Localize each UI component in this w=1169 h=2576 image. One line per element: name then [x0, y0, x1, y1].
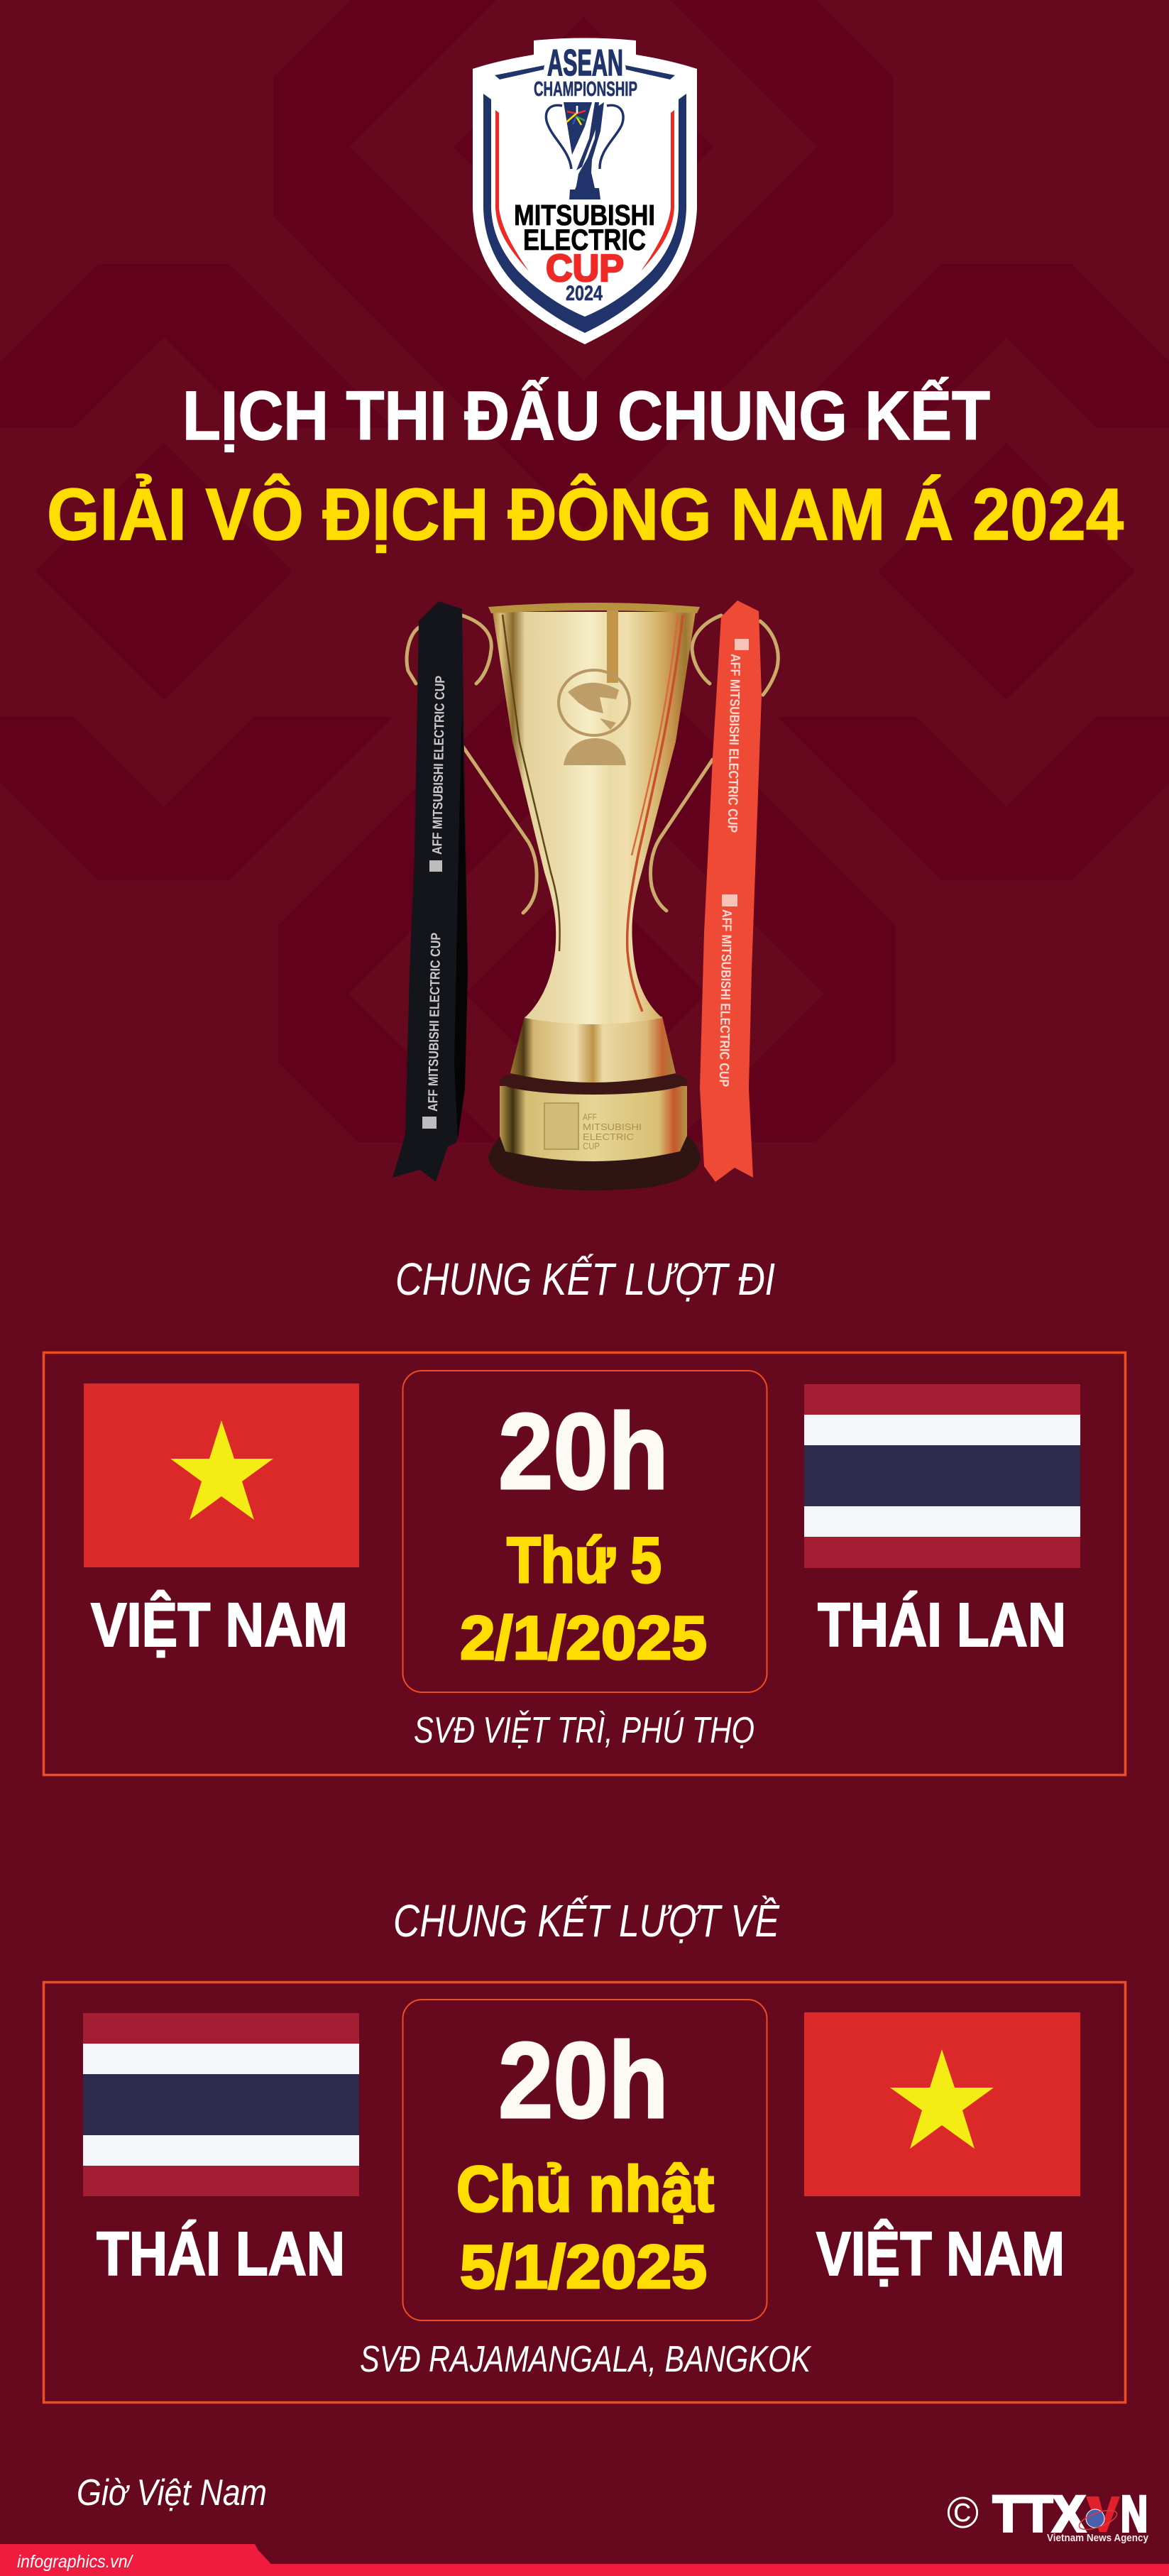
trophy emblem: globe and fan: [559, 670, 630, 765]
flag: Thailand: [804, 1384, 1080, 1568]
venue: SVĐ VIỆT TRÌ, PHÚ THỌ: [414, 1710, 754, 1751]
trophy base engraving: ELECTRIC: [583, 1131, 634, 1142]
logo trophy icon: [546, 102, 623, 199]
team name: Viet Nam: VIỆT NAM: [816, 2220, 1065, 2289]
text: MITSUBISHI: MITSUBISHI: [514, 199, 655, 231]
trophy base engraving: [544, 1103, 642, 1151]
team name: Thai Lan: THÁI LAN: [97, 2220, 345, 2289]
time and date box: [403, 1371, 767, 1692]
trophy base engraving: CUP: [583, 1141, 600, 1151]
trophy upper tier: [510, 1016, 676, 1083]
top side bars: [495, 65, 675, 80]
flag: Vietnam: [84, 1383, 359, 1567]
heading: second leg: CHUNG KẾT LƯỢT VỀ: [393, 1895, 780, 1946]
title: [47, 377, 1124, 555]
footer bar: [0, 2544, 1169, 2576]
trophy dark ring: [499, 1068, 688, 1095]
note: Vietnam time: Giờ Việt Nam: [77, 2472, 267, 2514]
flag: Vietnam: [804, 2012, 1080, 2196]
time and date box: [403, 2000, 767, 2320]
trophy bowl and stem: [493, 612, 696, 1024]
footer website: infographics.vn/: [17, 2552, 134, 2572]
agency letter V: [1086, 2496, 1120, 2532]
flag: Thailand: [83, 2013, 359, 2196]
text: 2024: 2024: [566, 282, 603, 305]
weekday: Chủ nhật: [456, 2154, 714, 2225]
shield navy band: [483, 94, 686, 333]
copyright mark: ©: [947, 2489, 979, 2538]
date: 5/1/2025: [460, 2233, 707, 2301]
panel: second leg match: [44, 1982, 1126, 2402]
red ribbon: [700, 601, 762, 1182]
agency letter N: N: [1121, 2487, 1148, 2543]
venue: SVĐ RAJAMANGALA, BANGKOK: [360, 2339, 812, 2380]
trophy photo illustration: [393, 601, 778, 1190]
black ribbon: [393, 601, 468, 1182]
shield red thin lines: [495, 110, 674, 271]
logo: ASEAN Championship Mitsubishi Electric Cup 2024 shield: [473, 38, 697, 344]
weekday: Thứ 5: [507, 1525, 662, 1596]
text: ELECTRIC: ELECTRIC: [523, 223, 646, 256]
trophy bottom disc: [488, 1134, 701, 1190]
heading: first leg: CHUNG KẾT LƯỢT ĐI: [395, 1253, 775, 1305]
team name: Thai Lan: THÁI LAN: [818, 1591, 1066, 1660]
ribbon label 3: AFF MITSUBISHI ELECTRIC CUP: [725, 654, 742, 833]
trophy lower tier: [500, 1086, 687, 1161]
kick-off time: 20h: [498, 2020, 669, 2141]
trophy base engraving: AFF: [583, 1112, 597, 1122]
text: CUP: CUP: [546, 247, 624, 290]
team name: Viet Nam: VIỆT NAM: [91, 1591, 348, 1660]
panel: first leg match: [44, 1353, 1126, 1775]
trophy handles: [407, 615, 778, 913]
text: ASEAN: ASEAN: [547, 43, 623, 84]
title line 1: LỊCH THI ĐẤU CHUNG KẾT: [182, 377, 990, 454]
trophy rim: [488, 603, 700, 613]
kick-off time: 20h: [498, 1391, 669, 1512]
agency globe: [1077, 2506, 1119, 2533]
trophy reflections: [503, 615, 683, 1012]
trophy base engraving: MITSUBISHI: [583, 1122, 642, 1132]
ribbon label 2: AFF MITSUBISHI ELECTRIC CUP: [426, 932, 444, 1112]
ribbon label 4: AFF MITSUBISHI ELECTRIC CUP: [716, 909, 734, 1087]
panel outer border: [44, 1353, 1126, 1775]
date: 2/1/2025: [460, 1604, 707, 1672]
shield white base: [473, 38, 697, 344]
agency logo: TTXVN: [947, 2487, 1149, 2544]
panel outer border: [44, 1982, 1126, 2402]
ribbon label 1: AFF MITSUBISHI ELECTRIC CUP: [430, 675, 448, 855]
agency tagline: Vietnam News Agency: [1047, 2532, 1149, 2544]
agency letters TTX: TTX: [993, 2487, 1085, 2543]
text: CHAMPIONSHIP: CHAMPIONSHIP: [534, 78, 637, 101]
